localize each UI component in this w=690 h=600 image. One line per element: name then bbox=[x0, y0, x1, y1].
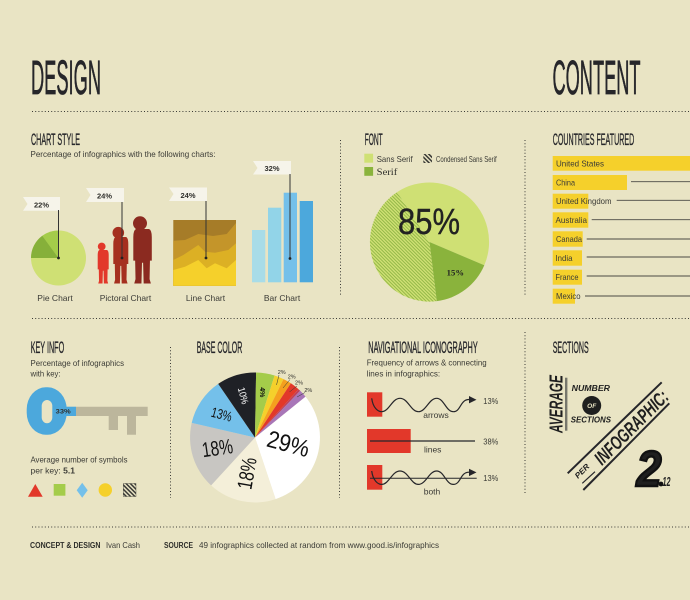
footer credits: 49 infographics collected at random from www.good.is/infographics bbox=[199, 540, 439, 550]
key graphic: 33% bbox=[56, 408, 71, 416]
symbols per key text: Average number of symbols bbox=[30, 455, 128, 465]
panel: sections: SECTIONS bbox=[553, 338, 589, 357]
panel: base color bbox=[190, 338, 320, 502]
flag: 24% pictoral bbox=[86, 188, 124, 259]
small percentage labels bbox=[276, 370, 312, 397]
number of sections label: OF bbox=[587, 403, 597, 410]
base color pie chart: 29% bbox=[264, 426, 312, 463]
chart type labels: Pictoral Chart bbox=[100, 293, 152, 303]
flag: 24% pictoral: 24% bbox=[97, 192, 112, 200]
footer credits: Ivan Cash bbox=[106, 540, 140, 550]
big number 2.12: 2 bbox=[636, 441, 662, 497]
font pie chart: 15% bbox=[447, 268, 464, 278]
panel: navigational iconography bbox=[367, 338, 499, 497]
number of sections label: SECTIONS bbox=[571, 415, 612, 424]
country labels: France bbox=[556, 272, 579, 282]
average label: AVERAGE bbox=[546, 374, 566, 434]
country labels: United States bbox=[556, 158, 604, 168]
small percentage labels: 2% bbox=[288, 374, 296, 380]
key graphic bbox=[27, 387, 148, 435]
text: DESIGN bbox=[31, 52, 101, 105]
base color pie chart: 13% bbox=[209, 404, 234, 425]
base color pie chart: 18% bbox=[234, 456, 262, 491]
key info description: Percentage of infographics bbox=[30, 358, 124, 368]
base color pie chart: 4% bbox=[258, 387, 265, 398]
navigation description: lines in infographics: bbox=[367, 369, 440, 379]
line chart icon bbox=[173, 220, 236, 286]
base color pie chart: 10% bbox=[235, 386, 250, 406]
flag: 24% line: 24% bbox=[180, 191, 196, 200]
flag: 22% bbox=[23, 197, 60, 259]
chart type labels: Pie Chart bbox=[37, 293, 73, 303]
base color pie chart bbox=[190, 372, 320, 502]
panel: navigational iconography: NAVIGATIONAL ICONOGRAPHY bbox=[368, 338, 478, 357]
small percentage labels: 2% bbox=[295, 380, 303, 386]
diagonal per infographic banner bbox=[568, 382, 673, 490]
flag: 32% bar bbox=[253, 161, 291, 260]
chart style description: Percentage of infographics with the following charts: bbox=[30, 149, 216, 159]
panel: font: FONT bbox=[365, 130, 383, 149]
navigation description: Frequency of arrows & connecting bbox=[367, 358, 487, 368]
panel: chart style: CHART STYLE bbox=[31, 130, 80, 149]
pie chart icon bbox=[31, 230, 86, 286]
small percentage labels: 2% bbox=[304, 388, 312, 394]
font pie chart: 85% bbox=[398, 201, 460, 242]
country labels: India bbox=[556, 253, 573, 263]
navigation description bbox=[367, 358, 487, 379]
chart type labels: Line Chart bbox=[186, 293, 226, 303]
row: both bbox=[367, 465, 499, 497]
panel: sections bbox=[546, 338, 673, 497]
footer credits: CONCEPT & DESIGN bbox=[30, 541, 101, 550]
flag: 32% bar: 32% bbox=[264, 164, 280, 173]
country leader lines bbox=[585, 182, 690, 296]
average label bbox=[546, 374, 567, 434]
country labels: China bbox=[556, 178, 575, 188]
row: both: both bbox=[424, 487, 441, 497]
footer credits bbox=[30, 540, 439, 550]
flag: 22%: 22% bbox=[34, 200, 49, 210]
font pie chart bbox=[370, 182, 489, 302]
key symbols bbox=[28, 483, 136, 498]
small percentage labels: 2% bbox=[278, 370, 286, 376]
row: arrows: arrows bbox=[423, 410, 449, 420]
row: lines: 38% bbox=[483, 436, 499, 446]
country labels: Mexico bbox=[556, 291, 581, 301]
font legend bbox=[364, 154, 497, 177]
panel: key info bbox=[27, 338, 148, 498]
row: arrows: 13% bbox=[483, 396, 499, 406]
panel: base color: BASE COLOR bbox=[197, 338, 242, 357]
row: lines: lines bbox=[424, 444, 441, 454]
pictoral chart icon bbox=[98, 216, 152, 284]
panel: countries featured bbox=[553, 130, 690, 304]
font legend: Condensed Sans Serif bbox=[436, 154, 497, 164]
number of sections label bbox=[571, 384, 612, 424]
panel: chart style bbox=[23, 130, 313, 303]
row: lines bbox=[367, 429, 499, 454]
panel: font bbox=[364, 130, 497, 302]
row: both: 13% bbox=[483, 473, 499, 483]
chart type labels: Bar Chart bbox=[264, 293, 301, 303]
big number 2.12: 12 bbox=[662, 474, 671, 489]
font legend: Serif bbox=[377, 167, 397, 177]
country bars bbox=[553, 156, 690, 304]
symbols per key text bbox=[30, 455, 128, 476]
country labels: United Kingdom bbox=[556, 196, 612, 206]
chart type labels bbox=[37, 293, 301, 303]
country labels bbox=[556, 158, 612, 301]
row: arrows bbox=[367, 392, 499, 420]
key info description: with key: bbox=[30, 369, 60, 379]
country labels: Australia bbox=[556, 215, 587, 225]
number of sections label: NUMBER bbox=[572, 384, 610, 393]
footer credits: SOURCE bbox=[164, 541, 194, 550]
panel: key info: KEY INFO bbox=[31, 338, 64, 357]
base color pie chart: 18% bbox=[200, 435, 234, 462]
key info description bbox=[30, 358, 124, 379]
country labels: Canada bbox=[556, 234, 582, 244]
symbols per key text: per key: 5.1 bbox=[30, 466, 75, 476]
flag: 24% line bbox=[169, 188, 207, 259]
bar chart icon bbox=[252, 193, 313, 282]
font legend: Sans Serif bbox=[377, 154, 413, 164]
diagonal per infographic banner: PER bbox=[573, 462, 592, 480]
